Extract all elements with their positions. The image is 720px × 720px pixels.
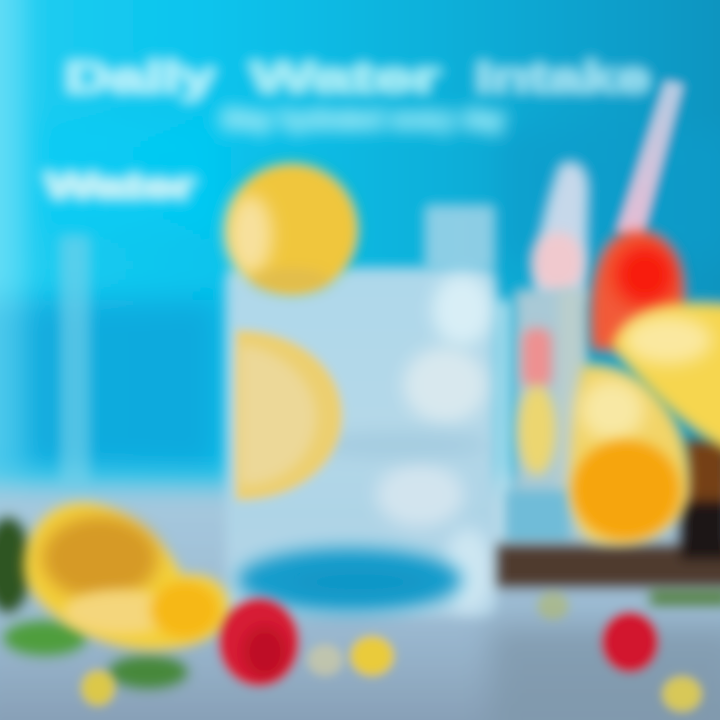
wooden board [497, 440, 720, 587]
red berry right [602, 612, 658, 672]
table surface [0, 482, 720, 720]
lemon half in glass [236, 330, 342, 500]
title: Daily [65, 53, 216, 102]
section label: Water [45, 165, 195, 206]
lemon slice above glass [224, 160, 360, 296]
leaves under right fruit [650, 590, 720, 606]
small yellow pieces [81, 592, 702, 712]
subtitle: Stay hydrated every day [220, 103, 505, 134]
left thin glass column [60, 235, 90, 485]
lemon bottom left [25, 502, 229, 650]
back bottle [495, 162, 588, 542]
main glass of water [226, 205, 496, 616]
title [65, 53, 650, 102]
orange half right [570, 365, 689, 543]
lemon wedge right [612, 303, 720, 455]
title: Intake [475, 53, 650, 102]
red berry bottom [219, 598, 299, 686]
red fruit top right [590, 230, 685, 350]
leaves bottom left [0, 517, 188, 689]
title: Water [250, 53, 440, 102]
straw [616, 80, 684, 240]
